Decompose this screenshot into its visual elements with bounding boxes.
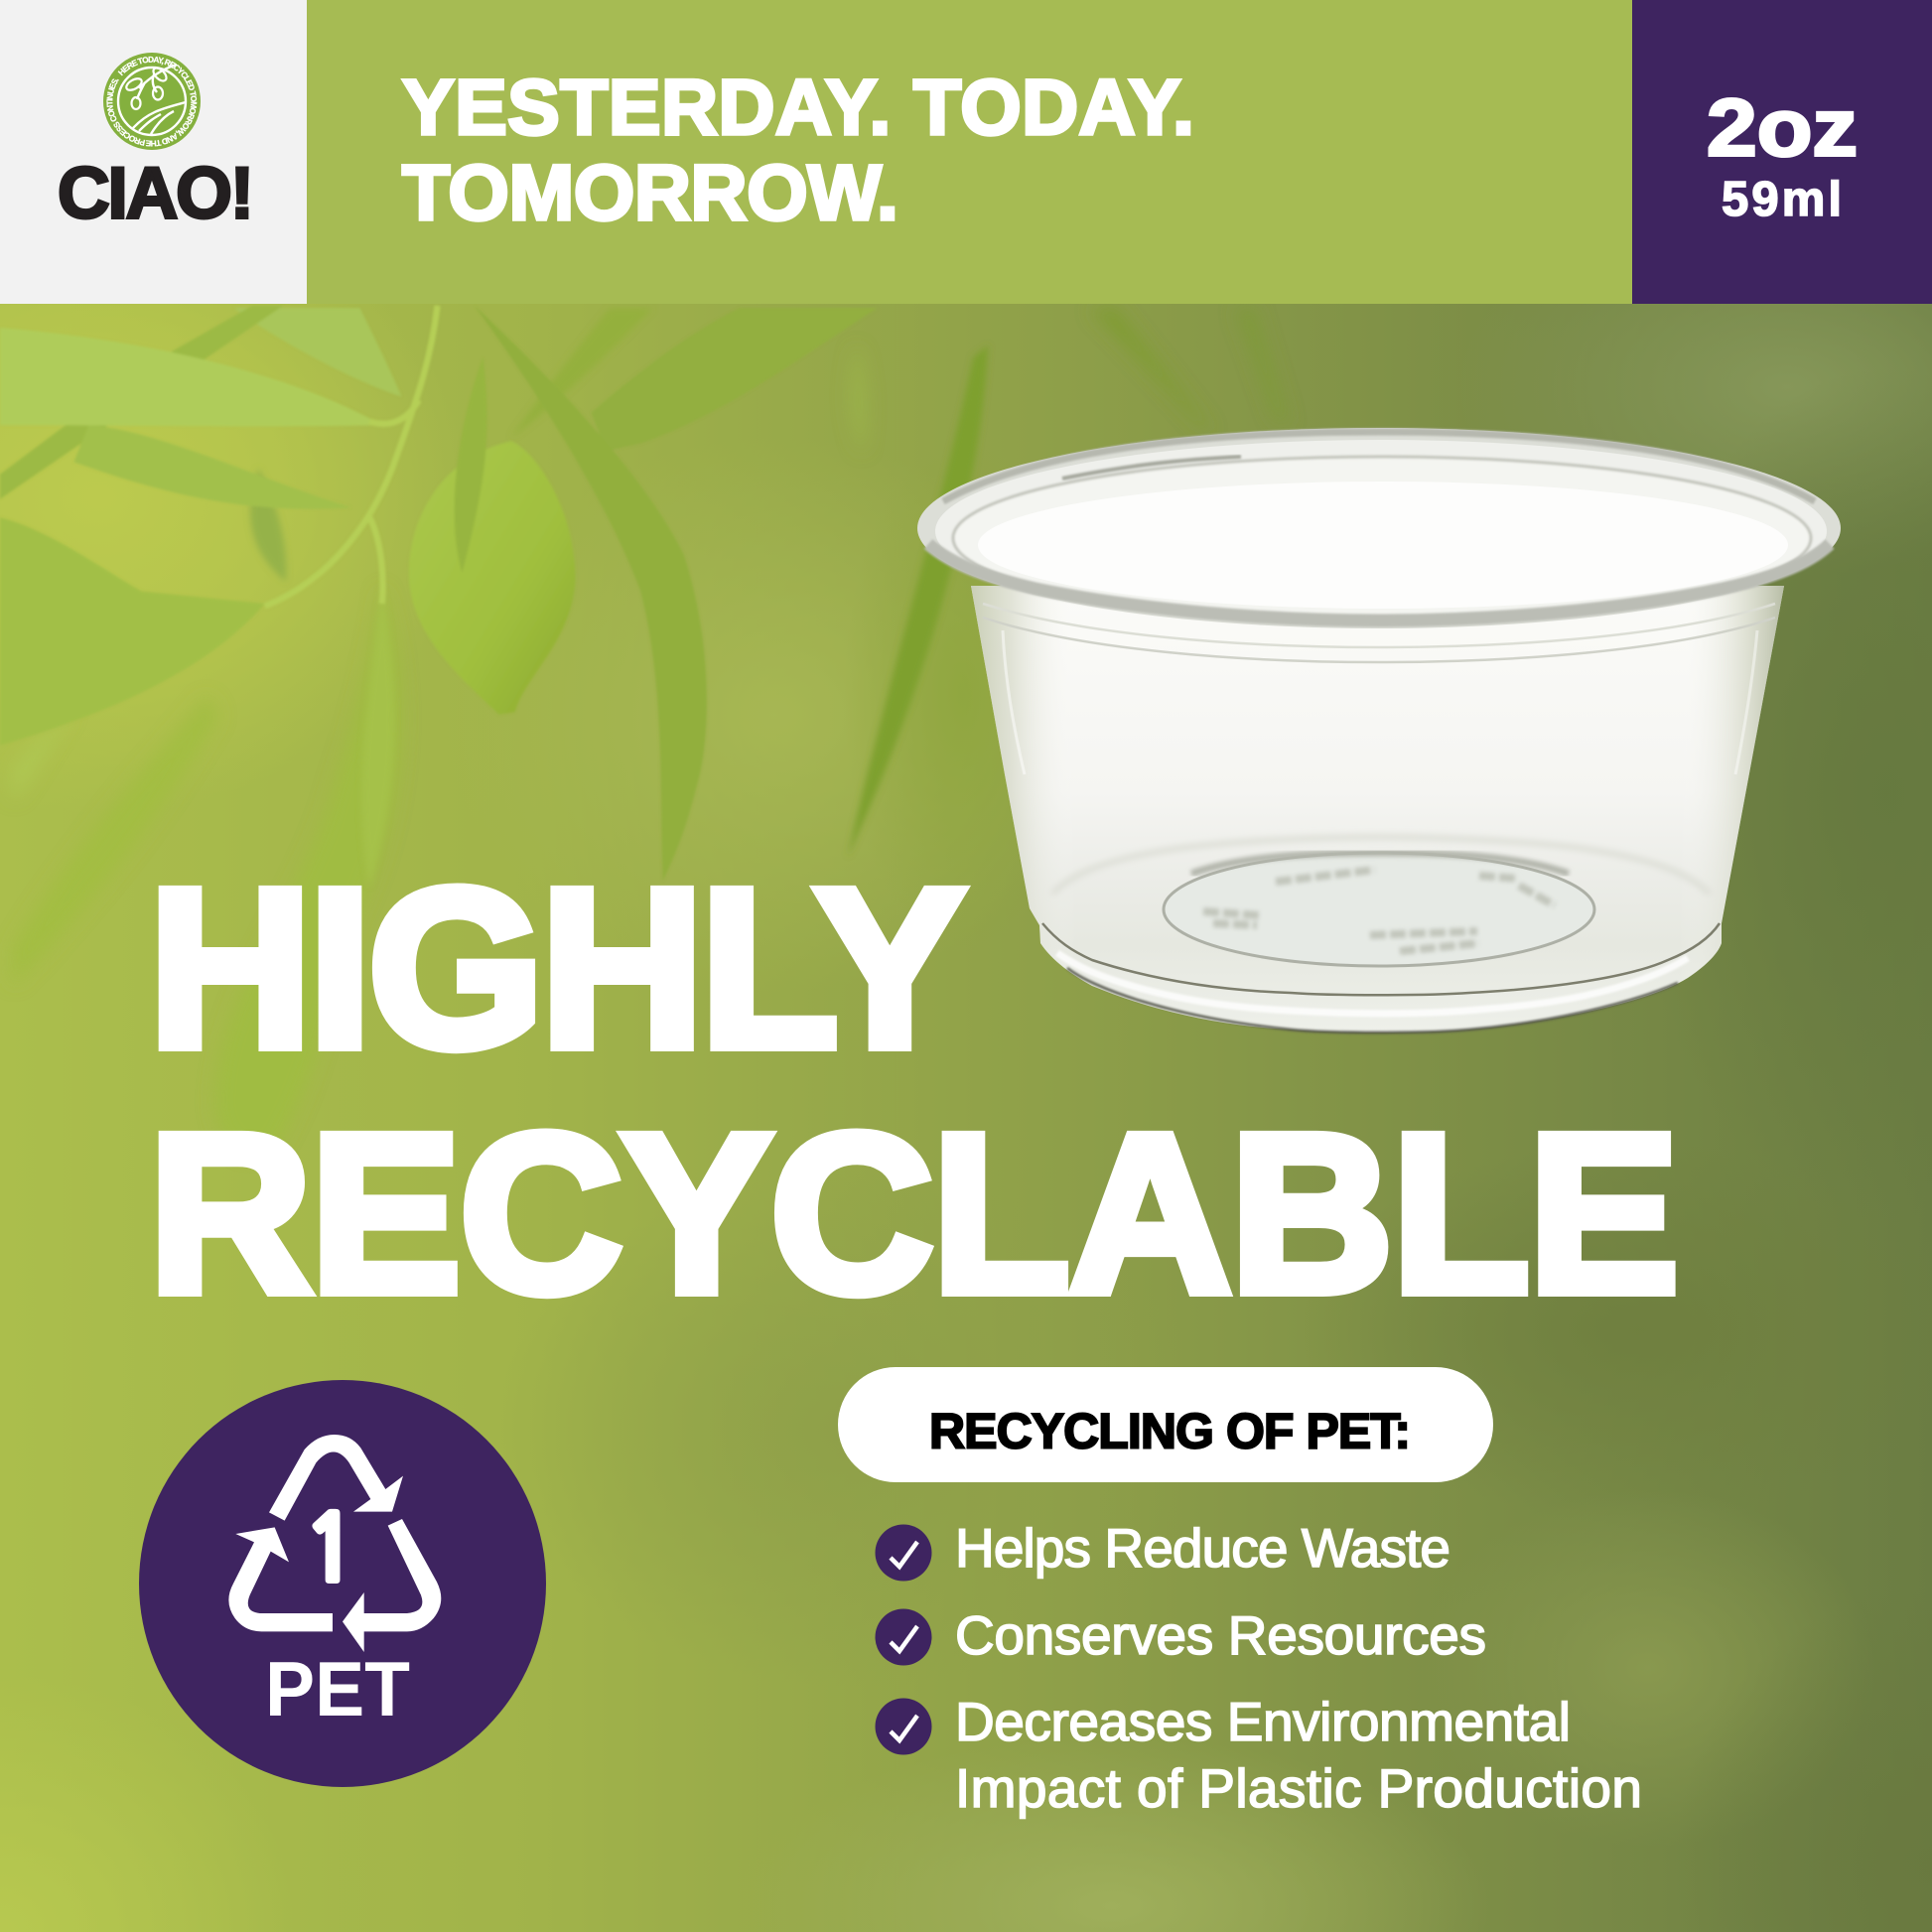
benefit 2: Conserves Resources [955,1604,1486,1666]
PET label: PET [265,1645,410,1732]
main heading: RECYCLABLE [149,1088,1679,1340]
recycling code number: 1 [303,1504,358,1594]
size panel: 59ml [1722,173,1842,226]
benefit 3: Decreases Environmental [955,1691,1571,1752]
benefit 3: Impact of Plastic Production [955,1757,1642,1819]
slogan [402,63,1194,236]
product photo: clear plastic cup [917,428,1841,1033]
slogan: TOMORROW. [402,148,898,236]
callout pill: recycling of PET [838,1367,1493,1482]
header band [0,0,1932,304]
callout pill: recycling of PET: RECYCLING OF PET: [929,1404,1411,1459]
PET recycling badge [139,1380,546,1787]
main heading [149,844,1679,1340]
slogan: YESTERDAY. TODAY. [402,63,1194,151]
size panel [1632,0,1932,304]
size panel: 2oz [1707,83,1858,173]
benefit 1: Helps Reduce Waste [955,1517,1450,1579]
benefits list [876,1517,1642,1819]
embossed marks [1203,870,1555,951]
main heading: HIGHLY [149,844,965,1094]
logo badge: HERE TODAY, RECYCLED TOMORROW, AND THE PROCESS CONTINUES. [106,56,197,147]
olive branch and leaves [0,306,1289,1154]
cup rim [917,428,1841,662]
icon: recycling arrows [228,1435,441,1652]
benefit 3 [876,1691,1642,1819]
cup base [1042,837,1720,1033]
header panel: logo [0,0,307,304]
logo wordmark: CIAO! [58,153,254,234]
cup body [971,586,1784,1033]
